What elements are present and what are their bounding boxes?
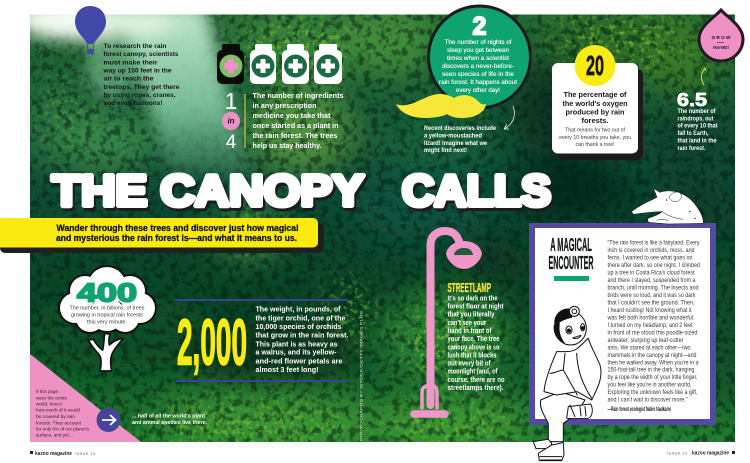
icon: purple arrow circle <box>96 408 120 432</box>
icon: yellow moustache <box>396 94 486 118</box>
panel: oxygen card: can thank a tree! <box>576 142 615 148</box>
text: research the canopy: way up 150 feet in the <box>102 68 172 74</box>
text: research the canopy: treetops. They get there <box>104 84 180 91</box>
stat: 1 in 4 <box>222 88 246 153</box>
text: research the canopy: must make their <box>104 59 158 66</box>
text: streetlamp: can't see your <box>448 320 486 327</box>
text: half of all species: ... half of all the world's plant <box>132 414 205 420</box>
panel: a magical encounter: inch is covered in orchids, moss, and <box>608 247 695 254</box>
panel: a magical encounter: ferns. I wanted to see what goes on <box>608 255 693 262</box>
footer: left <box>30 451 95 457</box>
panel: pink triangle <box>30 354 141 442</box>
panel: a magical encounter: branch, until morning. The insects and <box>608 284 699 292</box>
footer: left: ISSUE 13 <box>75 452 95 456</box>
stat: 2,000 orchid: 10,000 species of orchids <box>256 322 342 331</box>
stat: 2,000 orchid: The weight, in pounds, of <box>256 304 341 314</box>
text: research the canopy: by using ropes, cranes, <box>104 92 176 99</box>
text: research the canopy: and even balloons! <box>104 100 162 107</box>
panel: a magical encounter: up a tree in Costa Rica's cloud forest <box>608 270 695 277</box>
icon: section tab raindrop <box>699 10 743 61</box>
panel: oxygen card: That means for two out of <box>565 128 625 134</box>
arrow: curved to lizard text <box>504 106 514 129</box>
panel: oxygen card: forests. <box>582 116 608 125</box>
stat: 2,000 orchid: This plant is as heavy as <box>256 340 338 348</box>
icon: streetlamp <box>414 231 482 414</box>
text: streetlamp: course, there are no <box>448 377 504 384</box>
text: streetlamp: canopy above is so <box>448 344 500 352</box>
text: photo credit: PHOTOGRAPHS BY ISTOCK/GETTY IMAGES PLUS <box>360 310 364 441</box>
panel: a magical encounter: there after dark, so one night, I climbed <box>608 262 700 269</box>
panel: oxygen card: 20 <box>586 50 604 81</box>
text: lizard: a yellow-moustached <box>424 134 482 140</box>
text: research the canopy <box>102 43 180 107</box>
stat: 6.5 raindrops: The number of <box>678 109 716 115</box>
text: lizard <box>424 126 497 154</box>
banner: intro: and mysterious the rain forest is—and what it means to us. <box>56 233 297 243</box>
text: streetlamp: moonlight (and, of <box>448 369 498 376</box>
text: half of all species: and animal species live there. <box>132 420 207 426</box>
panel: 400 cloud: growing in tropical rain forests <box>71 312 143 318</box>
text: streetlamp: forest floor at night <box>448 304 504 311</box>
text: lizard: Recent discoveries include <box>424 126 497 132</box>
panel: a magical encounter: and I can't wait to discover more.” <box>608 397 688 404</box>
text: lizard: lizard! Imagine what we <box>424 141 488 147</box>
panel: 400 cloud: this very minute. <box>87 320 127 326</box>
stat: 6.5 raindrops: fall to Earth, <box>678 131 709 137</box>
panel: a magical encounter: I turned on my headlamp, and 2 feet <box>608 322 693 329</box>
panel: a magical encounter: ants. We stared at each other—two <box>608 344 691 351</box>
text: streetlamp: lush that it blocks <box>448 353 497 360</box>
text: ingredients: once started as a plant in <box>252 121 338 130</box>
text: streetlamp: STREETLAMP <box>448 281 491 295</box>
text: research the canopy: forest canopy, scientists <box>104 51 179 58</box>
text: research the canopy: air to reach the <box>104 76 154 83</box>
title: The Canopy Calls: THE CANOPY <box>52 166 364 216</box>
text: lizard: might find next! <box>424 148 467 154</box>
text: research the canopy: To research the rain <box>104 43 167 50</box>
panel: pink triangle: If this page <box>36 389 58 395</box>
panel: a magical encounter: in front of me stood this poodle-sized <box>608 329 698 336</box>
panel: green circle stat 2: every other day! <box>456 87 500 94</box>
panel: a magical encounter: mammals in the canopy at night—and <box>608 352 697 359</box>
panel: a magical encounter: that I couldn't see the ground. Then, <box>608 300 695 306</box>
panel: oxygen card: The percentage of <box>564 90 627 99</box>
panel: a magical encounter: I heard rustling! Not knowing what it <box>608 307 692 314</box>
title: The Canopy Calls: CALLS <box>402 166 551 216</box>
panel: pink triangle: for only 6% of our planet's <box>36 426 90 432</box>
footer: right <box>667 450 735 456</box>
icon: anteater <box>632 188 703 224</box>
panel: green circle stat 2: rain forest. It happens about <box>439 79 517 86</box>
panel: a magical encounter: —Rain forest ecologist Nalini Nadkarni <box>608 406 671 413</box>
text: ingredients: medicine you take that <box>252 111 331 120</box>
text: streetlamp: It's so dark on the <box>448 296 498 303</box>
stat: 1 in 4: 4 <box>226 132 237 153</box>
panel: pink triangle: be covered by rain <box>36 414 75 420</box>
footer: right: ISSUE 13 <box>667 452 687 456</box>
panel: a magical encounter: anteater, slurping up leaf-cutter <box>608 337 684 344</box>
title: The Canopy Calls: CALLS <box>404 170 553 218</box>
panel: oxygen card: produced by rain <box>566 108 625 116</box>
panel: pink triangle: were the entire <box>36 395 67 401</box>
panel: 400 cloud: 400 <box>77 278 137 308</box>
banner: intro: Wander through these trees and discover just how magical <box>56 223 298 233</box>
panel: a magical encounter: “The rain forest is like a fairyland. Every <box>608 240 700 247</box>
panel: pink triangle: surface, and yet ... <box>36 433 74 439</box>
panel: a magical encounter: birds were so loud, and it was so dark <box>608 292 696 299</box>
text: half of all species <box>132 414 207 426</box>
stat: 6.5 raindrops: 6.5 <box>677 90 707 110</box>
panel: 400 cloud: The number, in billions, of trees <box>70 306 145 312</box>
icon: scientist with headlamp <box>533 306 601 461</box>
panel: green circle stat 2: sleep you get between <box>447 47 509 54</box>
panel: green circle stat 2: The number of nights of <box>444 39 512 46</box>
text: ingredients <box>252 91 344 150</box>
stat: 6.5 raindrops <box>677 90 718 152</box>
panel: a magical encounter: A MAGICAL <box>550 235 592 255</box>
panel: green circle stat 2: times when a scientist <box>447 55 509 62</box>
stat: 2,000 orchid: and-red flower petals are <box>256 356 342 366</box>
arrow: yellow curve <box>701 68 706 85</box>
text: streetlamp <box>448 281 504 392</box>
panel: a magical encounter: by a rope the width of your little finger, <box>608 374 698 381</box>
stat: 2,000 orchid: that grow in the rain forest. <box>256 331 348 340</box>
text: ingredients: in any prescription <box>252 101 316 110</box>
panel: green circle stat 2: discovers a never-before- <box>442 63 514 70</box>
panel: oxygen card: the world's oxygen <box>562 99 628 108</box>
panel: pink triangle: world, here's <box>36 402 63 408</box>
stat: 2,000 orchid: 2,000 <box>177 306 247 378</box>
icon: tree <box>88 333 123 371</box>
banner: intro <box>0 218 324 253</box>
icon: hot air balloon <box>75 6 106 54</box>
panel: a magical encounter: then he walked away. When you're in a <box>608 359 699 366</box>
stat: 1 in 4: 1 <box>225 88 237 114</box>
text: streetlamp: streetlamps there). <box>448 385 504 392</box>
text: streetlamp: hand in front of <box>448 328 492 335</box>
panel: green circle stat 2: 2 <box>473 12 486 40</box>
panel: green circle stat 2 <box>428 6 530 108</box>
panel: pink triangle: how much of it would <box>36 408 80 414</box>
text: streetlamp: that you literally <box>448 312 495 319</box>
panel: a magical encounter: Exploring the unknown feels like a gift, <box>608 389 698 396</box>
panel: a magical encounter: was felt both horrible and wonderful. <box>607 314 695 321</box>
stat: 6.5 raindrops: rain forest. <box>678 146 706 152</box>
stat: 6.5 raindrops: of every 10 that <box>678 124 718 130</box>
icon: medicine bottles <box>217 44 342 84</box>
title: The Canopy Calls <box>52 166 553 218</box>
panel: a magical encounter: ENCOUNTER <box>548 253 594 273</box>
panel: oxygen card <box>552 45 643 160</box>
panel: green circle stat 2: seen species of life in the <box>442 71 514 78</box>
stat: 2,000 orchid: a walrus, and its yellow- <box>256 348 337 357</box>
stat: 6.5 raindrops: that land in the <box>678 138 717 144</box>
panel: a magical encounter <box>529 223 716 425</box>
stat: 6.5 raindrops: raindrops, out <box>678 116 714 122</box>
footer: right: kazoo magazine <box>692 450 729 456</box>
stat: 2,000 orchid: almost 3 feet long! <box>256 365 318 374</box>
icon: section tab raindrop: GROW <box>712 35 731 41</box>
panel: a magical encounter: 150-foot-tall tree in the dark, hanging <box>608 367 695 374</box>
panel: oxygen card: every 10 breaths you take, you <box>559 135 631 141</box>
stat: 2,000 orchid: the tiger orchid, one of the <box>256 314 346 322</box>
panel: 400 cloud <box>60 267 155 332</box>
text: streetlamp: your face. The tree <box>448 336 500 343</box>
icon: section tab raindrop: RAIN FOREST <box>713 45 729 50</box>
text: ingredients: The number of ingredients <box>252 91 344 100</box>
panel: a magical encounter: and there I stayed, suspended from a <box>608 277 696 284</box>
footer: left: kazoo magazine <box>35 451 72 457</box>
text: ingredients: the rain forest. The trees <box>252 131 338 140</box>
stat: 1 in 4: in <box>227 116 235 126</box>
title: The Canopy Calls: THE CANOPY <box>54 170 366 218</box>
panel: pink triangle: forests. They account <box>36 420 82 426</box>
panel: a magical encounter: you feel like you're in another world. <box>608 382 692 389</box>
text: streetlamp: out every bit of <box>448 361 491 368</box>
text: ingredients: help us stay healthy. <box>252 141 322 150</box>
